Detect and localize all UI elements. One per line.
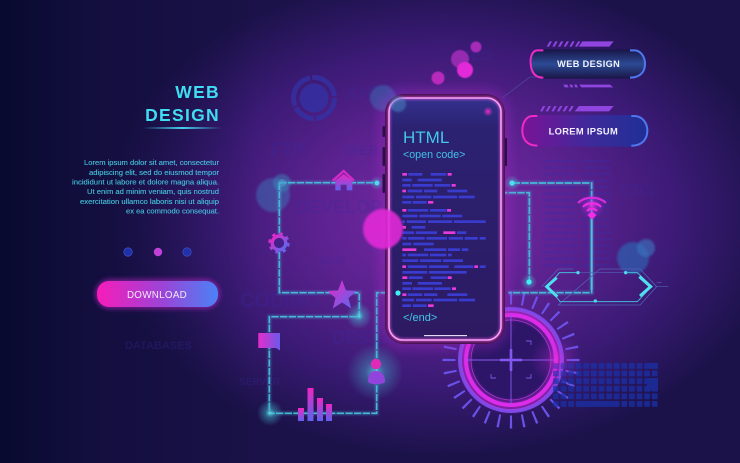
phone subtitle: <open code> bbox=[403, 149, 465, 161]
hexagon frame bbox=[542, 269, 668, 305]
ghost background words: DEVELOP bbox=[296, 197, 382, 217]
icon: star bbox=[328, 280, 356, 308]
ghost background words: UI/UX bbox=[319, 256, 346, 267]
floating pink dots bbox=[432, 42, 482, 84]
phone end tag: </end> bbox=[403, 312, 437, 324]
intro paragraph bbox=[72, 158, 220, 216]
right connector network bbox=[500, 183, 592, 293]
icon: donut chart bbox=[294, 78, 334, 118]
intro paragraph: exercitation ullamco laboris nisi ut aliquip bbox=[80, 197, 219, 206]
ghost background words: SEO bbox=[462, 47, 492, 63]
ghost background words: CSS bbox=[620, 180, 655, 199]
icon: chat bubble bbox=[258, 333, 280, 350]
ghost background words: CODING bbox=[240, 290, 320, 312]
phone camera bbox=[484, 108, 492, 116]
targeting ring bbox=[449, 298, 573, 422]
pagination dots bbox=[124, 248, 191, 256]
code lines bbox=[402, 173, 486, 307]
ghost background words: DATABASES bbox=[125, 340, 192, 352]
phone callout line bbox=[502, 77, 604, 98]
dim code block behind wifi bbox=[543, 160, 621, 268]
intro paragraph: incididunt ut labore et dolore magna aliqua. bbox=[72, 178, 219, 186]
icon: home bbox=[332, 169, 355, 190]
intro paragraph: Lorem ipsum dolor sit amet, consectetur bbox=[84, 158, 220, 167]
phone overlay blobs bbox=[363, 96, 406, 296]
paragraph glow blobs bbox=[256, 85, 655, 274]
label: web design bbox=[530, 41, 646, 87]
phone side buttons bbox=[382, 126, 507, 193]
ghost background words bbox=[125, 47, 655, 388]
heading: web design: WEB bbox=[175, 82, 220, 102]
icon: wifi bbox=[578, 193, 606, 220]
ghost background words: XHTML bbox=[345, 83, 414, 105]
heading: web design: DESIGN bbox=[145, 105, 220, 125]
label: lorem ipsum bbox=[522, 106, 648, 147]
icon: bar chart bbox=[298, 388, 332, 421]
download button: DOWNLOAD bbox=[127, 290, 187, 301]
label stripes bbox=[540, 106, 614, 111]
ghost background words: DESIGN bbox=[332, 328, 401, 348]
intro paragraph: ex ea commodo consequat. bbox=[126, 206, 219, 216]
phone title: HTML bbox=[403, 128, 449, 147]
right connector nodes bbox=[493, 175, 537, 290]
left connector network bbox=[269, 183, 398, 413]
ghost background words: FTP bbox=[271, 140, 305, 160]
keyboard bbox=[553, 363, 659, 408]
heading: web design bbox=[145, 82, 220, 125]
phone home bar bbox=[424, 335, 467, 336]
intro paragraph: adipiscing elit, sed do eiusmod tempor bbox=[89, 168, 220, 177]
label: lorem ipsum: LOREM IPSUM bbox=[549, 127, 618, 137]
label: web design: WEB DESIGN bbox=[557, 59, 620, 69]
intro paragraph: Ut enim ad minim veniam, quis nostrud bbox=[87, 187, 219, 196]
ghost background words: SERVER bbox=[239, 377, 281, 388]
icon: person bbox=[368, 359, 385, 384]
left connector nodes bbox=[257, 176, 405, 426]
heading underline bbox=[143, 127, 222, 129]
phone bbox=[378, 88, 510, 350]
download button bbox=[95, 279, 220, 309]
ring pink flare bbox=[530, 334, 582, 386]
ghost background words: WEB bbox=[346, 142, 379, 158]
icon: gear bbox=[270, 234, 288, 252]
label stripes bbox=[547, 41, 614, 87]
